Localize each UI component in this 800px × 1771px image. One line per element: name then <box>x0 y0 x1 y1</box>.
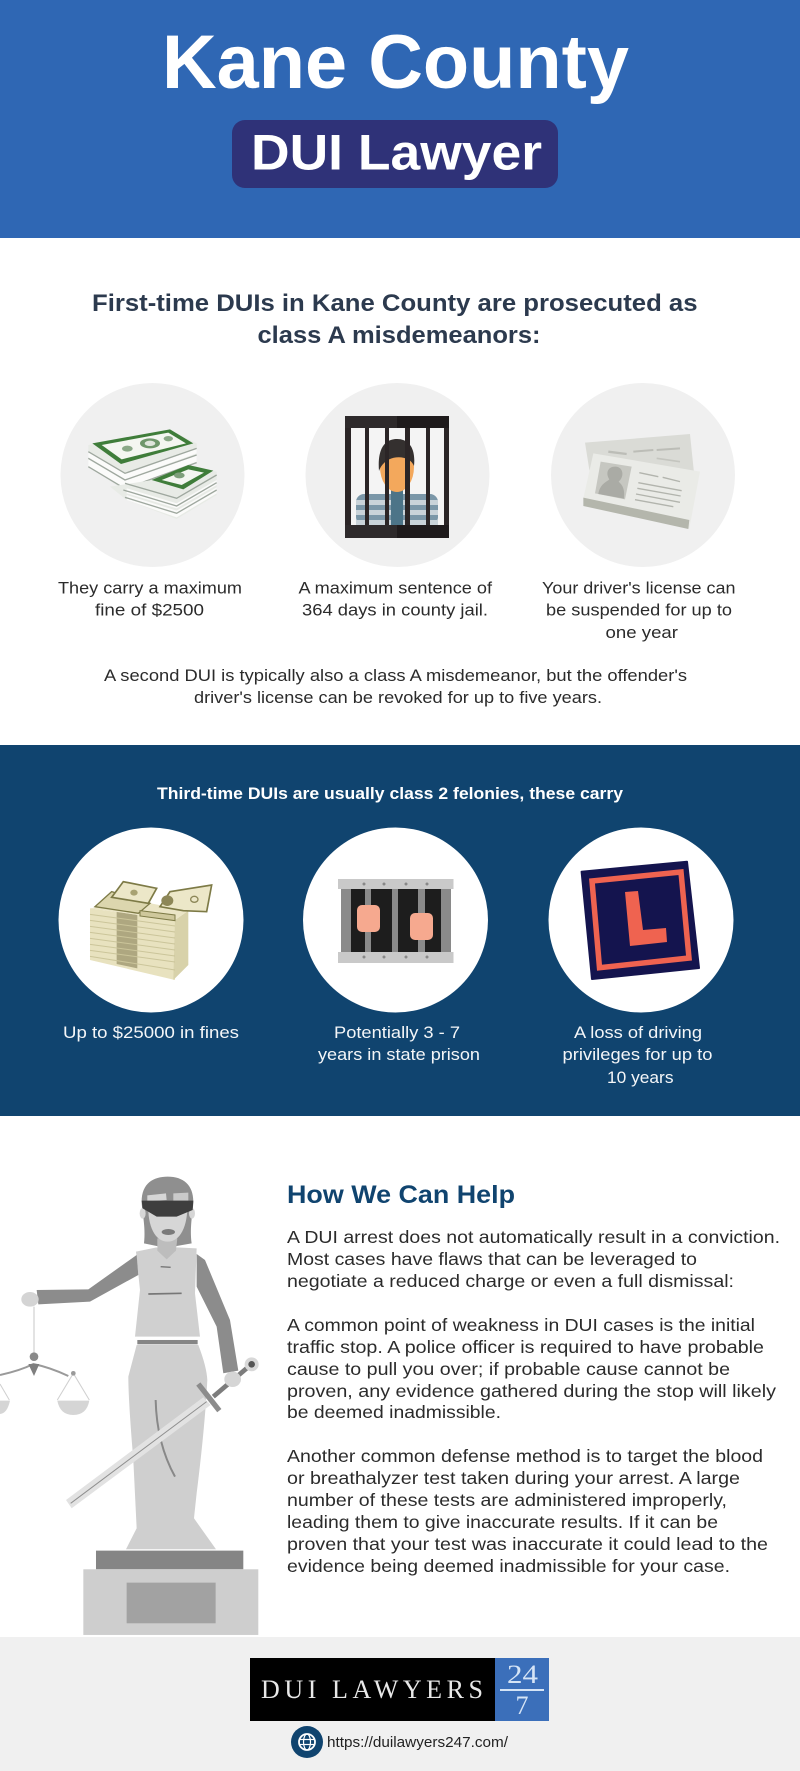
text block: how we can help: negotiate a reduced charge or even a full dismissal: <box>287 1271 734 1291</box>
heading: first-time DUIs: First-time DUIs in Kane County are prosecuted as <box>92 290 698 317</box>
heading: first-time DUIs: class A misdemeanors: <box>258 322 540 349</box>
logo: DUI Lawyers 24/7: DUI LAWYERS <box>261 1675 483 1704</box>
caption: license suspension <box>542 580 736 642</box>
icon: driver's license cards <box>551 383 735 567</box>
text block: how we can help: evidence being deemed inadmissible for your case. <box>287 1556 730 1576</box>
illustration: lady justice statue <box>0 1177 259 1635</box>
caption: driving privileges: A loss of driving <box>574 1024 702 1042</box>
panel: fine <box>58 383 244 620</box>
icon: hands on prison bars <box>303 828 488 1012</box>
text block: how we can help: cause to pull you over; if probable cause cannot be <box>287 1359 730 1379</box>
text block: how we can help <box>287 1227 780 1576</box>
website url: https://duilawyers247.com/ <box>327 1734 509 1751</box>
title: Kane County <box>162 20 629 105</box>
heading: third-time DUIs: Third-time DUIs are usually class 2 felonies, these carry <box>157 785 624 803</box>
panel: license suspension <box>542 383 736 642</box>
caption: fines: Up to $25000 in fines <box>63 1024 239 1042</box>
caption: license suspension: one year <box>606 624 679 642</box>
shirt <box>356 494 438 525</box>
icon: stacks of green cash <box>60 383 244 567</box>
icon: globe <box>291 1726 323 1758</box>
text block: how we can help: be deemed inadmissible. <box>287 1402 501 1422</box>
caption: prison: Potentially 3 - 7 <box>334 1024 460 1042</box>
header banner <box>0 0 800 238</box>
text block: how we can help: leading them to give inaccurate results. If it can be <box>287 1512 718 1532</box>
caption: fine: fine of $2500 <box>95 602 204 620</box>
panel: third-time DUIs <box>0 745 800 1116</box>
caption: driving privileges <box>562 1024 712 1087</box>
caption: driving privileges: privileges for up to <box>562 1046 712 1064</box>
subtitle pill: DUI Lawyer <box>251 124 542 180</box>
caption: prison <box>318 1024 480 1064</box>
text block: how we can help: traffic stop. A police officer is required to have probable <box>287 1337 764 1357</box>
caption: driving privileges: 10 years <box>607 1069 674 1087</box>
icon: learner L sign <box>548 828 734 1012</box>
text block: how we can help: proven, any evidence gathered during the stop will likely <box>287 1381 776 1401</box>
logo: DUI Lawyers 24/7 <box>250 1658 549 1721</box>
subtitle pill <box>232 120 558 188</box>
panel: jail sentence <box>298 383 492 620</box>
text block: how we can help: A DUI arrest does not automatically result in a conviction. <box>287 1227 780 1247</box>
text block: second DUI <box>104 667 687 707</box>
caption: jail sentence: 364 days in county jail. <box>302 602 488 620</box>
text block: how we can help: number of these tests are administered improperly, <box>287 1490 727 1510</box>
heading: how we can help: How We Can Help <box>287 1181 515 1209</box>
logo: DUI Lawyers 24/7: 24 <box>507 1660 538 1689</box>
logo: DUI Lawyers 24/7: 7 <box>516 1691 528 1720</box>
text block: how we can help: A common point of weakness in DUI cases is the initial <box>287 1315 755 1335</box>
caption: license suspension: be suspended for up to <box>546 602 732 620</box>
text block: second DUI: A second DUI is typically also a class A misdemeanor, but the offender's <box>104 667 687 685</box>
text block: second DUI: driver's license can be revoked for up to five years. <box>194 689 602 707</box>
heading: first-time DUIs <box>92 290 698 349</box>
caption: jail sentence <box>298 580 492 620</box>
footer <box>0 1637 800 1771</box>
text block: how we can help: or breathalyzer test taken during your arrest. A large <box>287 1468 740 1488</box>
text block: how we can help: proven that your test was inaccurate it could lead to the <box>287 1534 768 1554</box>
caption: fine <box>58 580 242 620</box>
text block: how we can help: Another common defense method is to target the blood <box>287 1446 763 1466</box>
caption: fine: They carry a maximum <box>58 580 242 598</box>
hair <box>142 1177 193 1246</box>
caption: license suspension: Your driver's license can <box>542 580 736 598</box>
icon: tall stack of cash <box>58 828 244 1012</box>
icon: prisoner behind bars <box>306 383 490 567</box>
caption: jail sentence: A maximum sentence of <box>298 580 492 598</box>
text block: how we can help: Most cases have flaws that can be leveraged to <box>287 1249 697 1269</box>
caption: prison: years in state prison <box>318 1046 480 1064</box>
